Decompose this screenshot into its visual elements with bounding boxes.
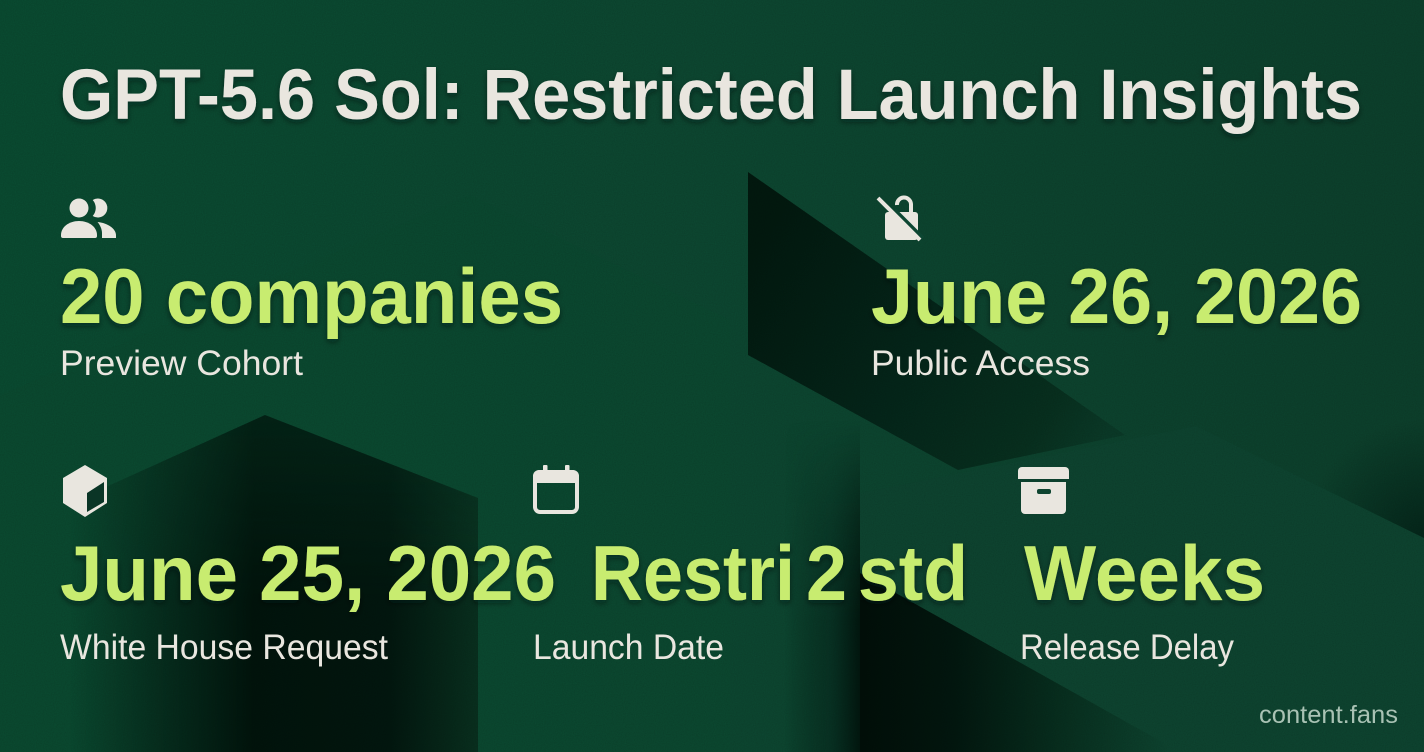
stat label: preview cohort: Preview Cohort — [60, 344, 303, 383]
panel: public access — [871, 197, 1362, 383]
icon: crossed-out lock — [878, 197, 923, 240]
stat value: Restri2std: Restri — [591, 529, 795, 617]
stat value: 20 companies: 20 companies — [60, 252, 563, 340]
watermark: content.fans — [1259, 701, 1398, 729]
panel: release delay — [1018, 467, 1265, 667]
stat value: Weeks: Weeks — [1024, 529, 1265, 617]
stat label: public access: Public Access — [871, 344, 1090, 383]
icon: users — [61, 198, 116, 238]
icon: calendar — [533, 465, 579, 512]
title: GPT-5.6 Sol: Restricted Launch Insights — [60, 56, 1362, 135]
icon: archive box — [1018, 467, 1069, 514]
icon: cube — [63, 465, 107, 517]
panel: white house request — [60, 465, 556, 667]
stat label: release delay: Release Delay — [1020, 628, 1234, 667]
stat value: June 25, 2026: June 25, 2026 — [60, 529, 556, 617]
stat label: launch date: Launch Date — [533, 628, 724, 667]
stat value: June 26, 2026: June 26, 2026 — [871, 252, 1362, 340]
stat value: Restri2std: 2 — [806, 529, 847, 617]
stat value: Restri2std: std — [858, 529, 968, 617]
panel: preview cohort — [60, 198, 563, 383]
stat label: white house request: White House Request — [60, 628, 388, 667]
panel: launch date — [533, 465, 968, 667]
